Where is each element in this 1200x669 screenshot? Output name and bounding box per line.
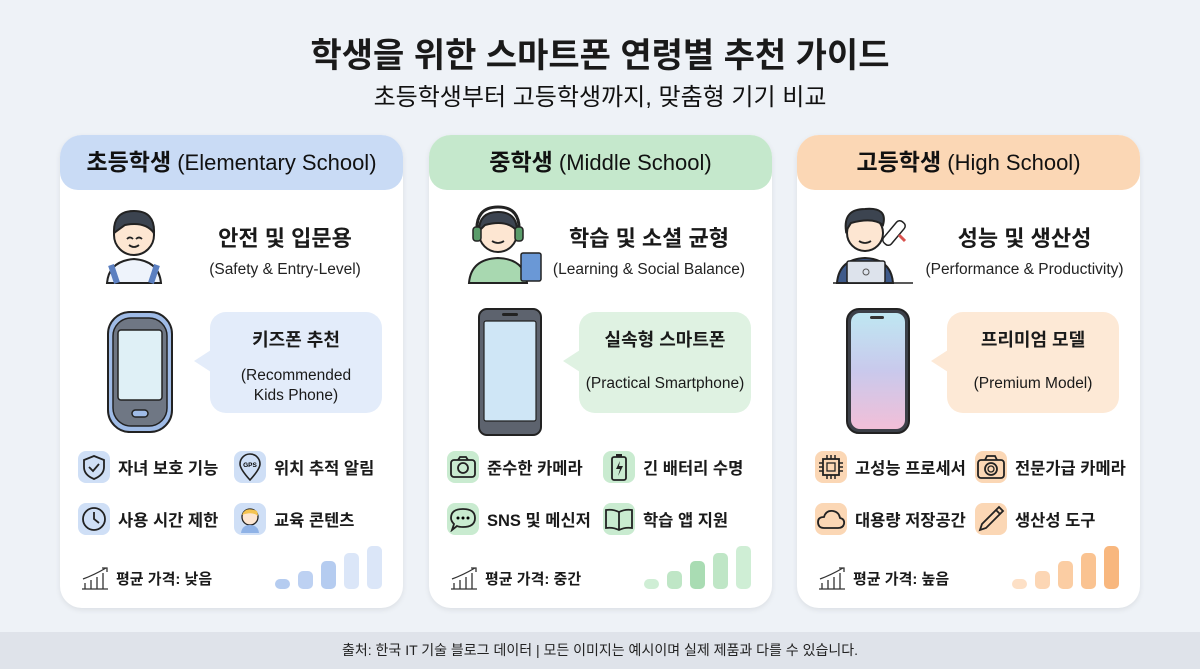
icon: child avatar [106,210,162,284]
heading: safety [209,226,361,278]
heading: learning balance [553,226,745,278]
feature: battery [603,451,743,483]
callout: kids phone: 키즈폰 추천 [252,330,340,350]
feature: camera: 준수한 카메라 [487,460,583,478]
heading: performance: (Performance & Productivity) [925,261,1124,278]
callout: practical smartphone: 실속형 스마트폰 [605,330,725,350]
feature: education [234,503,354,535]
footer: 출처: 한국 IT 기술 블로그 데이터 | 모든 이미지는 예시이며 실제 제품과 다를 수 있습니다. [342,642,858,658]
icon: student with headphones [468,206,542,284]
feature: camera [447,451,583,483]
feature: storage [815,503,966,535]
footer [0,632,1200,669]
price: medium [451,567,581,590]
heading: safety: (Safety & Entry-Level) [209,261,361,278]
price: high [819,567,949,590]
heading: safety: 안전 및 입문용 [218,226,352,251]
heading: performance [925,226,1124,278]
header: elementary: 초등학생 (Elementary School) [86,149,377,175]
callout: kids phone: Kids Phone) [254,387,338,404]
feature: sns [447,503,591,535]
feature: productivity tools: 생산성 도구 [1015,512,1095,530]
feature: battery: 긴 배터리 수명 [643,460,743,478]
heading: learning balance: (Learning & Social Balance) [553,261,745,278]
icon: kids phone [107,311,173,433]
feature: gps [234,451,374,483]
feature: gps: 위치 추적 알림 [274,460,374,478]
feature: sns: SNS 및 메신저 [487,512,591,530]
feature: study apps [603,503,728,535]
feature: gps: GPS [243,462,258,469]
header: middle [429,135,772,190]
callout: premium model: (Premium Model) [974,375,1092,392]
title: 학생을 위한 스마트폰 연령별 추천 가이드 [310,37,890,75]
panel: high [797,135,1140,608]
price: medium: 평균 가격: 중간 [485,570,581,588]
callout: premium model: 프리미엄 모델 [981,330,1085,350]
price: low: 평균 가격: 낮음 [116,570,212,588]
header: elementary [60,135,403,190]
panel: middle [429,135,772,608]
feature: parental control: 자녀 보호 기능 [118,460,218,478]
panel: elementary [60,135,403,608]
heading: learning balance: 학습 및 소셜 균형 [569,226,729,251]
callout: practical smartphone: (Practical Smartphone) [586,375,744,392]
price: low [82,567,212,590]
subtitle: 초등학생부터 고등학생까지, 맞춤형 기기 비교 [374,84,826,111]
price: high: 평균 가격: 높음 [853,570,949,588]
header: high: 고등학생 (High School) [856,149,1081,175]
bar chart: low [275,546,382,589]
feature: pro camera: 전문가급 카메라 [1015,460,1126,478]
header: middle: 중학생 (Middle School) [489,149,712,175]
callout: kids phone: (Recommended [241,367,351,384]
feature: parental control [78,451,218,483]
bar chart: high [1012,546,1119,589]
feature: storage: 대용량 저장공간 [855,512,966,530]
feature: processor: 고성능 프로세서 [855,460,966,478]
callout: kids phone [210,312,382,413]
bar chart: medium [644,546,751,589]
feature: productivity tools [975,503,1095,535]
heading: performance: 성능 및 생산성 [958,226,1091,251]
icon: practical smartphone [478,308,542,436]
feature: pro camera [975,451,1126,483]
icon: student with laptop [833,208,913,284]
feature: time limit [78,503,218,535]
feature: education: 교육 콘텐츠 [274,512,354,530]
callout: premium model [947,312,1119,413]
callout: practical smartphone [579,312,751,413]
feature: processor [815,451,966,483]
feature: time limit: 사용 시간 제한 [118,512,218,530]
header: high [797,135,1140,190]
icon: premium phone [846,308,910,434]
feature: study apps: 학습 앱 지원 [643,512,728,530]
